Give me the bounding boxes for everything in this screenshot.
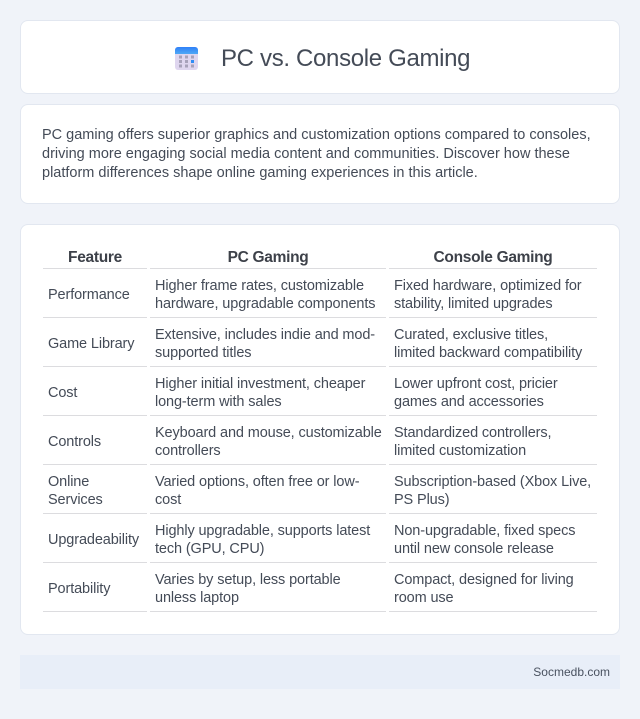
table panel <box>20 224 620 635</box>
row: game library: Extensive, includes indie and mod- <box>155 327 375 343</box>
row: performance: Higher frame rates, customizable <box>155 278 364 294</box>
row: controls: Controls <box>48 434 101 450</box>
footer text: Socmedb.com <box>533 665 610 679</box>
row: upgradeability: Non-upgradable, fixed specs <box>394 523 575 539</box>
row: performance: hardware, upgradable components <box>155 296 375 312</box>
row: cost: Cost <box>48 385 77 401</box>
intro text: driving more engaging social media content and communities. Discover how these <box>42 146 570 162</box>
row: portability <box>48 572 574 606</box>
row: controls: controllers <box>155 443 221 459</box>
row: controls: Standardized controllers, <box>394 425 551 441</box>
row: controls: limited customization <box>394 443 526 459</box>
intro text: PC gaming offers superior graphics and customization options compared to consoles, <box>42 126 591 142</box>
row: performance: Fixed hardware, optimized for <box>394 278 582 294</box>
row: performance: Performance <box>48 287 130 303</box>
row: cost <box>48 376 558 410</box>
footer bar <box>20 655 620 689</box>
row: portability: Varies by setup, less portable <box>155 572 341 588</box>
row: performance: stability, limited upgrades <box>394 296 552 312</box>
row: portability: Compact, designed for living <box>394 572 574 588</box>
row: upgradeability <box>48 523 575 557</box>
header panel <box>20 20 620 94</box>
row: performance <box>48 278 582 312</box>
icon: calendar <box>175 47 198 70</box>
row: game library: supported titles <box>155 345 251 361</box>
intro text <box>42 126 591 180</box>
row: upgradeability: until new console release <box>394 541 554 557</box>
row: online services: cost <box>155 492 181 508</box>
row: online services <box>48 474 591 508</box>
row: cost: games and accessories <box>394 394 544 410</box>
row: controls <box>48 425 551 459</box>
row: portability: Portability <box>48 581 110 597</box>
row: online services: Online <box>48 474 89 490</box>
row: online services: PS Plus) <box>394 492 449 508</box>
column headings: PC Gaming <box>228 249 308 266</box>
intro text: platform differences shape online gaming experiences in this article. <box>42 164 478 180</box>
column headings: Console Gaming <box>434 249 552 266</box>
row: controls: Keyboard and mouse, customizable <box>155 425 382 441</box>
row: upgradeability: Highly upgradable, supports latest <box>155 523 370 539</box>
row: game library: Game Library <box>48 336 134 352</box>
row: portability: unless laptop <box>155 590 239 606</box>
column headings <box>68 249 552 266</box>
row: portability: room use <box>394 590 453 606</box>
row: cost: long-term with sales <box>155 394 282 410</box>
row: game library <box>48 327 582 361</box>
comparison table <box>43 249 597 612</box>
row: online services: Services <box>48 492 103 508</box>
row: upgradeability: tech (GPU, CPU) <box>155 541 264 557</box>
title: PC vs. Console Gaming <box>221 45 470 72</box>
row: online services: Subscription-based (Xbox Live, <box>394 474 591 490</box>
intro panel <box>20 104 620 204</box>
column headings: Feature <box>68 249 122 266</box>
row: cost: Higher initial investment, cheaper <box>155 376 365 392</box>
row: game library: Curated, exclusive titles, <box>394 327 548 343</box>
row: online services: Varied options, often free or low- <box>155 474 359 490</box>
row: upgradeability: Upgradeability <box>48 532 139 548</box>
row: game library: limited backward compatibility <box>394 345 582 361</box>
row: cost: Lower upfront cost, pricier <box>394 376 558 392</box>
